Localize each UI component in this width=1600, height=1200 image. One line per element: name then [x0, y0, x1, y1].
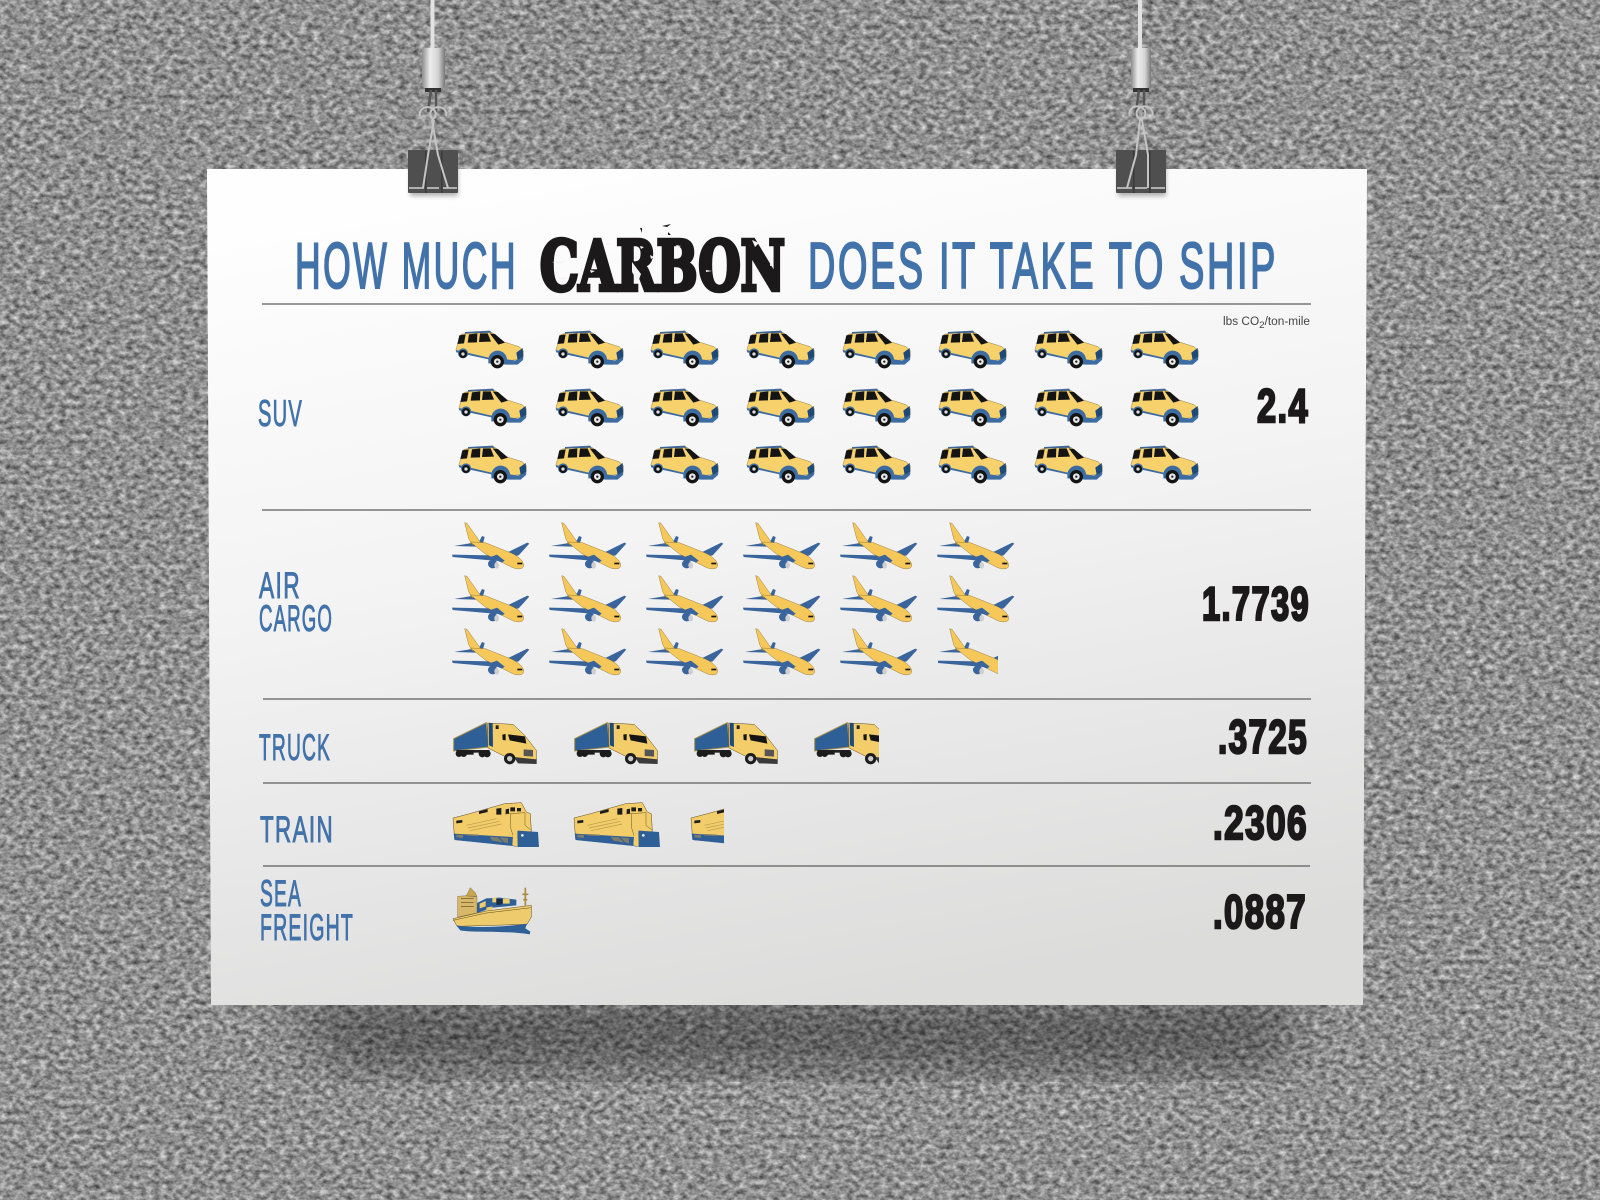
- title: HOW MUCH: [295, 229, 518, 302]
- value: train: .2306: [1213, 796, 1308, 849]
- title: [295, 224, 1278, 307]
- value: truck: .3725: [1218, 710, 1308, 763]
- paper shadow: [280, 1000, 1310, 1068]
- row label: truck: TRUCK: [259, 727, 331, 768]
- value: SUV: 2.4: [1257, 379, 1309, 432]
- value: air cargo: 1.7739: [1202, 577, 1310, 630]
- row label: sea freight: SEA: [260, 873, 302, 914]
- row label: air cargo: [259, 565, 333, 639]
- row label: air cargo: AIR: [259, 565, 301, 606]
- row label: air cargo: CARGO: [259, 598, 333, 639]
- row label: sea freight: [260, 873, 354, 948]
- icons: SUV pictogram 24 cars: [456, 331, 1198, 483]
- row label: sea freight: FREIGHT: [260, 907, 354, 948]
- unit label: lbs CO: [1223, 316, 1258, 328]
- row dividers: [262, 304, 1311, 866]
- unit label: 2: [1259, 320, 1265, 331]
- title word: carbon: CARBON: [540, 227, 785, 307]
- title: DOES IT TAKE TO SHIP: [808, 229, 1278, 302]
- row label: SUV: SUV: [258, 393, 303, 434]
- binder clip right: [1116, 106, 1166, 196]
- row label: train: TRAIN: [260, 809, 334, 850]
- cable sleeve left: [422, 48, 445, 88]
- icon: container ship: [453, 888, 531, 934]
- icons: truck pictogram: [454, 723, 898, 764]
- binder clip left: [408, 107, 458, 196]
- icons: train pictogram: [452, 802, 724, 847]
- icons: air cargo pictogram planes: [452, 523, 1014, 675]
- hanging wire left: [425, 0, 441, 112]
- paper sheet: [207, 169, 1367, 1005]
- cable sleeve right: [1131, 48, 1151, 88]
- unit label: /ton-mile: [1265, 316, 1310, 328]
- value: sea freight: .0887: [1213, 885, 1307, 938]
- hanging wire right: [1133, 0, 1149, 112]
- title word: carbon: [540, 224, 785, 307]
